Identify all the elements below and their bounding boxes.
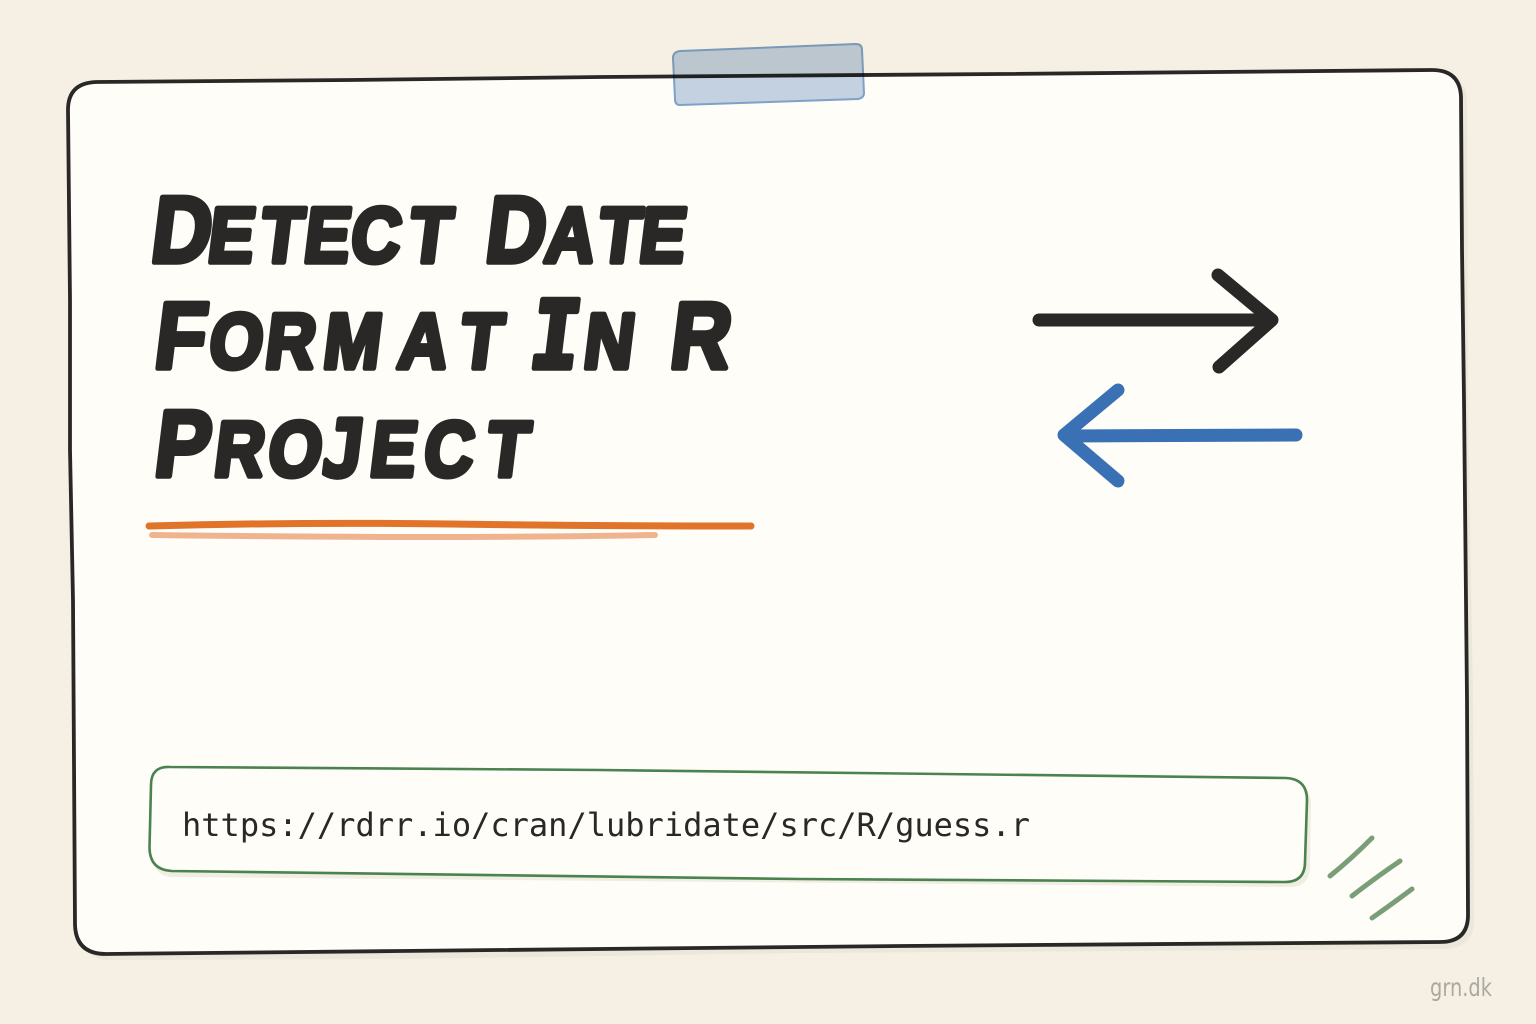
watermark: grn.dk <box>1430 973 1492 1002</box>
decorative tape <box>673 44 864 105</box>
title line 3: J <box>318 405 370 495</box>
title line 2: ORMAT <box>205 297 540 385</box>
arrow: black right <box>1039 275 1272 367</box>
title line 2: R <box>665 283 738 388</box>
title line 1: ETECT <box>204 191 499 279</box>
url box <box>150 767 1311 887</box>
title line 1: D <box>146 177 219 282</box>
title <box>146 177 738 496</box>
title line 2: N <box>580 297 668 385</box>
title line 2: I <box>524 280 588 390</box>
title line 1: ATE <box>541 191 692 279</box>
title line 1: D <box>481 177 553 282</box>
title underline <box>149 523 751 537</box>
arrow: blue left <box>1064 390 1296 481</box>
hatch marks <box>1330 838 1412 918</box>
title line 3: P <box>150 391 218 496</box>
title line 3: RO <box>210 405 328 493</box>
title line 3: ECT <box>366 405 535 493</box>
panel: card <box>68 70 1474 960</box>
url text: https://rdrr.io/cran/lubridate/src/R/guess.r <box>182 806 1030 844</box>
title line 2: F <box>150 283 213 388</box>
